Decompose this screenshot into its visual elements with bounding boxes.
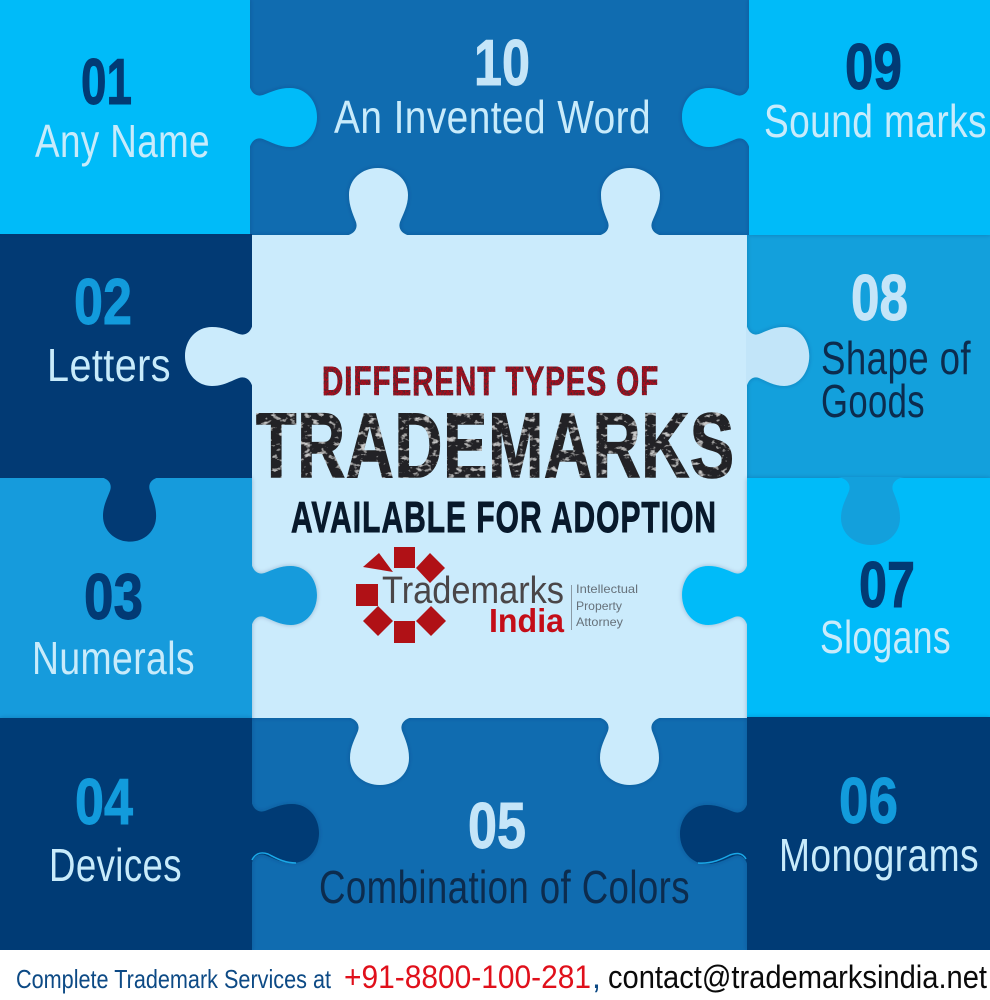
text: item 04: 04 [75, 765, 133, 838]
footer band [0, 950, 990, 1000]
text: item 10: An Invented Word [334, 91, 651, 143]
text: item 06: 06 [839, 764, 898, 837]
text: item 03 [32, 560, 195, 684]
text: logo tagline: Property [576, 599, 622, 613]
heading: available for adoption: AVAILABLE FOR ADOPTION [291, 492, 716, 541]
panel: centre puzzle piece [185, 168, 809, 785]
text: footer phone: +91-8800-100-281 [344, 959, 591, 995]
heading: different types of: DIFFERENT TYPES OF [322, 358, 658, 404]
text: item 01: 01 [81, 45, 132, 118]
icon: centre tab over piece 02 [185, 323, 253, 389]
text: logo tagline [576, 582, 638, 629]
text: footer services: Complete Trademark Services at [16, 964, 332, 994]
icon: highlight under left tab [252, 853, 296, 863]
text: item 09 [764, 30, 987, 147]
text: item 05: Combination of Colors [319, 861, 690, 913]
text: logo tagline: Attorney [576, 615, 623, 629]
text: item 07: Slogans [820, 611, 951, 663]
text: item 01: Any Name [35, 115, 210, 167]
text: item 04: Devices [49, 839, 182, 891]
text: item 08 [821, 261, 971, 427]
text: item 03: Numerals [32, 632, 195, 684]
text: item 04 [49, 765, 182, 891]
text: item 02: 02 [74, 265, 132, 338]
panel: puzzle piece 06 [680, 717, 990, 950]
text: item 01 [35, 45, 210, 167]
panel: puzzle piece 09 [682, 0, 990, 235]
text: item 02: Letters [47, 339, 171, 391]
icon: highlight under right tab [698, 854, 746, 863]
text: item 07: 07 [859, 548, 915, 621]
text: item 08: 08 [851, 261, 908, 334]
panel: puzzle piece 04 [0, 718, 319, 950]
text: item 07 [820, 548, 951, 663]
panel: puzzle piece 08 [747, 235, 990, 478]
icon: logo ring [356, 547, 446, 643]
text: item 09: 09 [845, 30, 902, 103]
panel: puzzle piece 07 [682, 478, 990, 717]
text: logo wordmark: Trademarks [382, 570, 564, 612]
icon: tab of piece 08 over piece 07 [838, 477, 904, 545]
panel: puzzle piece 03 [0, 478, 317, 718]
text: item 05: 05 [468, 789, 526, 862]
panel: puzzle piece 01 [0, 0, 317, 234]
text: item 08: Goods [821, 375, 925, 427]
panel: puzzle piece 05 background [252, 717, 747, 950]
panel: puzzle piece 02 [0, 234, 252, 542]
text: logo India: India [489, 602, 565, 639]
heading: trademarks: TRADEMARKS [256, 393, 734, 497]
text: item 02 [47, 265, 171, 391]
text: item 10: 10 [474, 26, 530, 99]
text: logo tagline: Intellectual [576, 582, 638, 596]
text: item 03: 03 [84, 560, 143, 633]
text: item 06 [779, 764, 979, 881]
text: item 10 [334, 26, 651, 143]
panel: puzzle piece 10 background [250, 0, 749, 236]
logo: Trademarks India [356, 547, 638, 643]
text: item 05 [319, 789, 690, 913]
text: footer comma: , [592, 959, 601, 995]
